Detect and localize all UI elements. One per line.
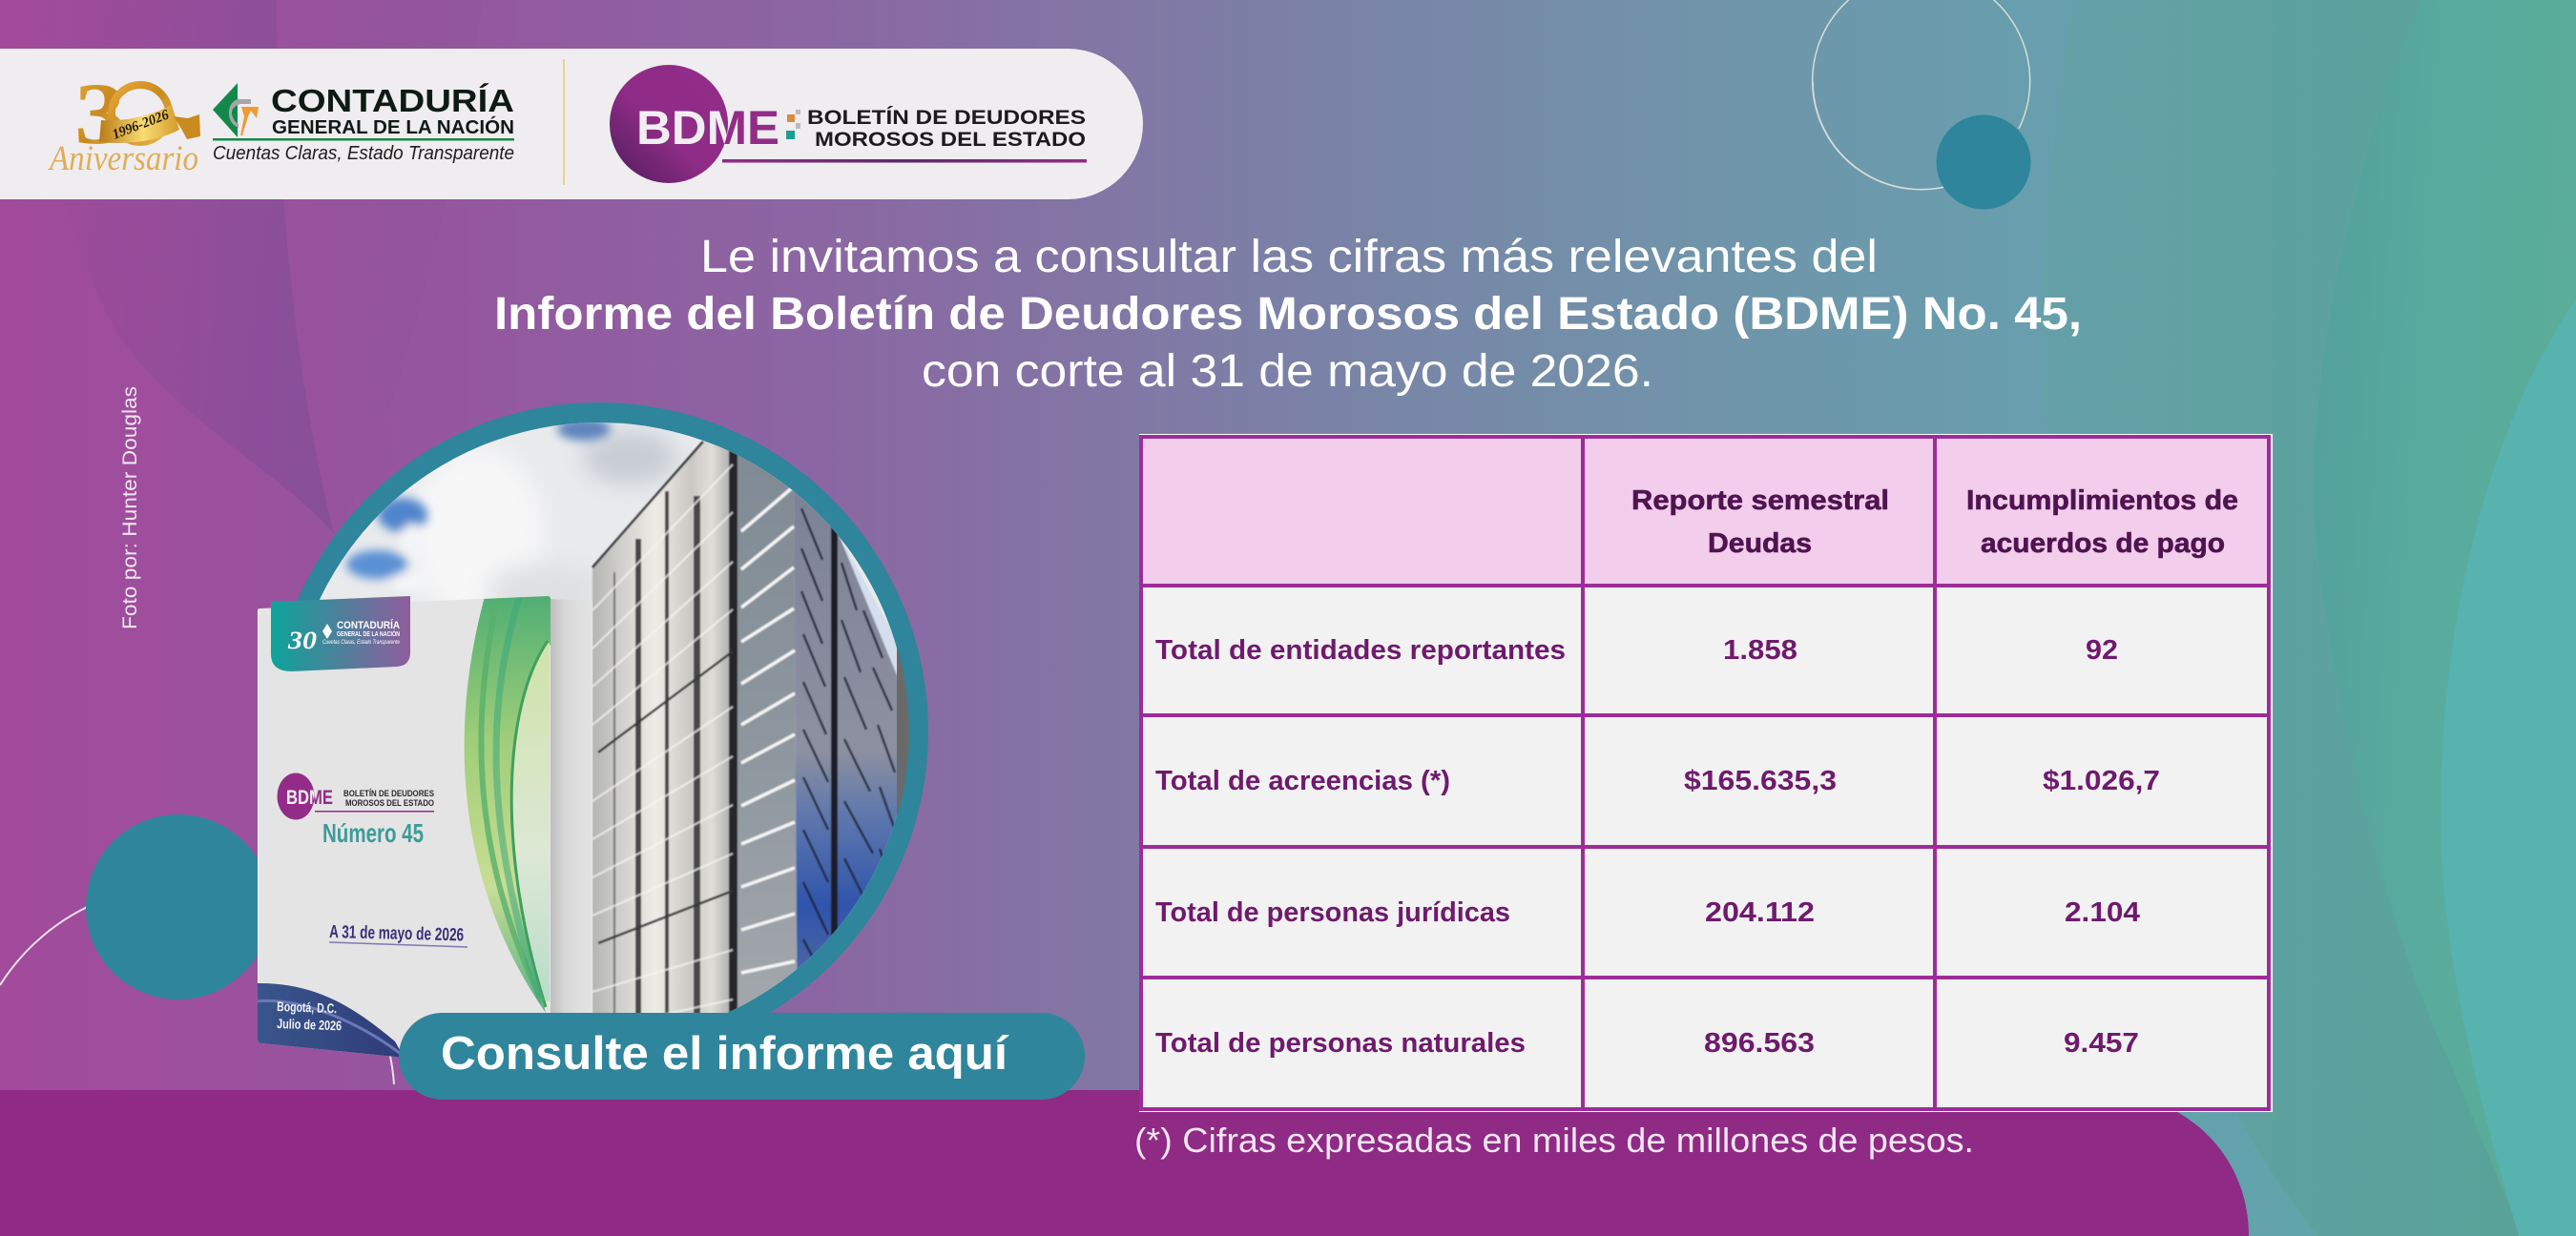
book city and date: [277, 999, 343, 1033]
photo circle with teal ring: [298, 402, 928, 1013]
row: entidades reportantes: 1.858: [1723, 635, 1797, 666]
photo: sky and building: [320, 422, 897, 1013]
ribbon: pale band: [513, 643, 550, 1001]
book tab logo text: Cuentas Claras, Estado Transparente: [322, 640, 401, 646]
left face floor lines: [592, 464, 733, 1068]
book city and date: Bogotá, D.C.: [277, 999, 337, 1016]
row: personas juridicas: Total de personas jurídicas: [1155, 897, 1510, 928]
ribbon: green band: [465, 593, 551, 1013]
logo: BDME text: [722, 107, 1087, 162]
bottom purple band: [0, 1090, 2249, 1236]
header white bar: [0, 49, 1143, 199]
logo: BDME text: BOLETÍN DE DEUDORES: [807, 107, 1086, 129]
row: personas naturales: Total de personas naturales: [1155, 1028, 1526, 1059]
table header row: Deudas: [1708, 528, 1812, 559]
logo: 30 aniversario: [47, 65, 200, 178]
logo: 30 aniversario: Aniversario: [47, 139, 198, 178]
row: personas naturales: 896.563: [1704, 1028, 1815, 1059]
book BDME logo: BOLETÍN DE DEUDORES: [343, 789, 434, 798]
sky: [320, 422, 897, 1013]
row: personas naturales: 9.457: [2064, 1028, 2139, 1059]
row: entidades reportantes: 92: [2086, 635, 2118, 666]
logo: contaduria icon: [213, 83, 259, 137]
row: acreencias: Total de acreencias (*): [1155, 766, 1450, 796]
row: acreencias: $1.026,7: [2043, 766, 2160, 796]
logo: BDME circle: BDME: [636, 101, 779, 154]
row: personas juridicas: 204.112: [1705, 897, 1815, 928]
table header row: acuerdos de pago: [1981, 528, 2225, 559]
call to action button: [399, 1013, 1085, 1100]
table body background: [1141, 586, 2269, 1109]
decorative ring bottom left: [0, 885, 394, 1084]
table header row: [1141, 437, 2269, 586]
logo: contaduria text: GENERAL DE LA NACIÓN: [272, 115, 514, 138]
book BDME logo: BDME: [286, 787, 333, 809]
book number: Número 45: [322, 818, 424, 848]
background waves: right: [2041, 0, 2576, 1236]
left face mullions: [613, 448, 838, 1068]
row: personas juridicas: [1155, 897, 2140, 928]
call to action button: Consulte el informe aquí: [441, 1028, 1008, 1080]
table header row: Reporte semestral: [1631, 485, 1889, 516]
book tab logo text: 30: [287, 627, 317, 654]
book BDME logo: MOROSOS DEL ESTADO: [345, 798, 434, 808]
book tab logo text: CONTADURÍA: [337, 619, 400, 631]
building: [592, 442, 902, 1068]
background waves: left: [19, 0, 483, 534]
book cover sheet: [256, 591, 553, 1087]
bottom wave: [258, 983, 400, 1057]
logo: 30 aniversario: 1996-2026: [111, 107, 172, 143]
logo: BDME circle: BDME: [636, 101, 779, 154]
header divider: [563, 59, 565, 185]
report book cover: [256, 591, 592, 1087]
logo: contaduria text: CONTADURÍA: [271, 83, 514, 118]
middle face floor lines: [741, 486, 795, 973]
logo: BDME circle: [610, 65, 800, 183]
title: Le invitamos a consultar las cifras más relevantes del: [700, 232, 1878, 282]
book tab logo text: [287, 619, 401, 654]
title: Informe del Boletín de Deudores Morosos del Estado (BDME) No. 45,: [494, 289, 2082, 340]
title: con corte al 31 de mayo de 2026.: [922, 346, 1653, 397]
logo: 30 aniversario: 3: [74, 65, 126, 162]
book tab logo text: GENERAL DE LA NACIÓN: [337, 629, 400, 638]
book pages: [548, 599, 592, 1049]
data table: [1139, 434, 2273, 1112]
right face slats: [801, 508, 895, 987]
logo: contaduria text: [213, 83, 514, 164]
book tab: [271, 596, 410, 671]
row: acreencias: [1155, 766, 2160, 796]
book BDME logo: BDME: [286, 787, 333, 809]
decorative teal dot left: [86, 814, 271, 999]
book BDME logo: [277, 772, 434, 820]
footnote: (*) Cifras expresadas en miles de millones de pesos.: [1134, 1121, 1974, 1160]
row: entidades reportantes: [1155, 635, 2118, 666]
table header row: Incumplimientos de: [1966, 485, 2238, 516]
photo crop shadow: [897, 646, 909, 817]
row: personas juridicas: 2.104: [2065, 897, 2140, 928]
row: personas naturales: [1155, 1028, 2139, 1059]
logo: contaduria text: Cuentas Claras, Estado Transparente: [213, 143, 514, 164]
row: entidades reportantes: Total de entidades reportantes: [1155, 635, 1566, 666]
logo: BDME text: MOROSOS DEL ESTADO: [815, 129, 1086, 151]
photo credit: Foto por: Hunter Douglas: [119, 386, 141, 629]
book date: A 31 de mayo de 2026: [329, 922, 464, 945]
book city and date: Julio de 2026: [277, 1016, 343, 1033]
title: [494, 232, 2082, 397]
decorative ring and dot top right: [1813, 0, 2030, 210]
row: acreencias: $165.635,3: [1684, 766, 1837, 796]
